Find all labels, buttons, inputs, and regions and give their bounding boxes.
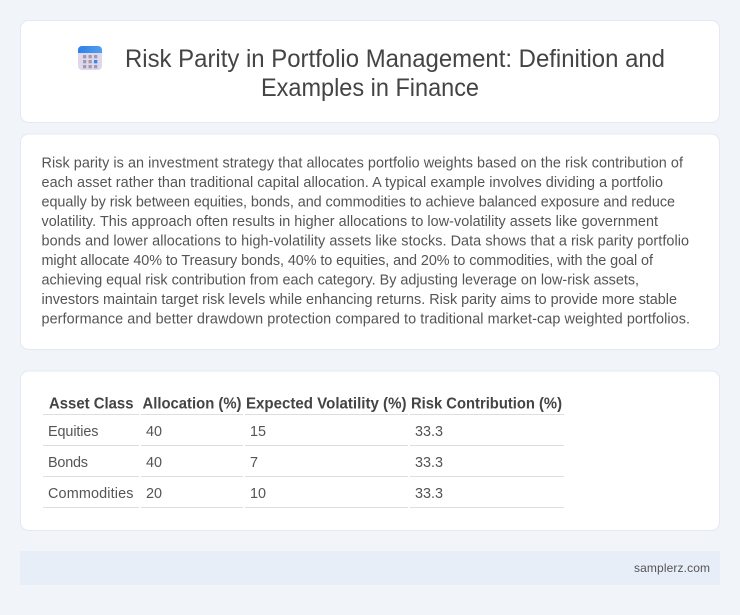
- description paragraph: bonds and lower allocations to high-volatility assets like stocks. Data shows that a risk parity portfolio: [42, 234, 689, 250]
- table row: equities: 15: [250, 424, 266, 440]
- panel: title: [20, 20, 720, 122]
- icon: calendar: [78, 46, 102, 70]
- description paragraph: performance and better drawdown protection compared to traditional market-cap weighted portfolios.: [42, 312, 690, 328]
- description paragraph: might allocate 40% to Treasury bonds, 40% to equities, and 20% to commodities, with the goal of: [42, 253, 654, 269]
- description paragraph: volatility. This approach often results in higher allocations to low-volatility assets like government: [42, 214, 658, 230]
- table header: Expected Volatility (%): [246, 396, 406, 412]
- table row: equities: 33.3: [415, 424, 443, 440]
- table row: equities: 40: [146, 424, 162, 440]
- table row: bonds: 33.3: [415, 455, 443, 471]
- table row: commodities: 33.3: [415, 486, 443, 502]
- description paragraph: equally by risk between equities, bonds, and commodities to achieve balanced exposure and reduce: [42, 194, 675, 210]
- title text: [125, 45, 665, 102]
- table row: bonds: [48, 455, 443, 471]
- table header: Asset Class: [49, 396, 134, 412]
- description paragraph: achieving equal risk contribution from each category. By adjusting leverage on low-risk assets,: [42, 272, 639, 288]
- description paragraph: investors maintain target risk levels while enhancing returns. Risk parity aims to provide more stable: [42, 292, 677, 308]
- footer source text: samplerz.com: [634, 561, 710, 575]
- table row: bonds: 7: [250, 455, 258, 471]
- description paragraph: [42, 156, 690, 328]
- table row: bonds: Bonds: [48, 455, 88, 471]
- table row: equities: [48, 424, 443, 440]
- title text: Examples in Finance: [261, 74, 479, 102]
- table row: equities: Equities: [48, 424, 98, 440]
- table row: commodities: Commodities: [48, 486, 134, 502]
- table row: commodities: 20: [146, 486, 162, 502]
- footer bar: [20, 551, 720, 585]
- table header: [49, 396, 562, 412]
- table row: commodities: 10: [250, 486, 266, 502]
- table header: Allocation (%): [142, 396, 242, 412]
- description paragraph: each asset rather than traditional capital allocation. A typical example involves dividing a portfolio: [42, 175, 663, 191]
- title text: Risk Parity in Portfolio Management: Definition and: [125, 45, 665, 73]
- panel: description: [20, 134, 720, 350]
- table row: commodities: [48, 486, 443, 502]
- table header: Risk Contribution (%): [411, 396, 562, 412]
- panel: table: [20, 371, 720, 530]
- table row: bonds: 40: [146, 455, 162, 471]
- description paragraph: Risk parity is an investment strategy that allocates portfolio weights based on the risk contribution of: [42, 156, 684, 172]
